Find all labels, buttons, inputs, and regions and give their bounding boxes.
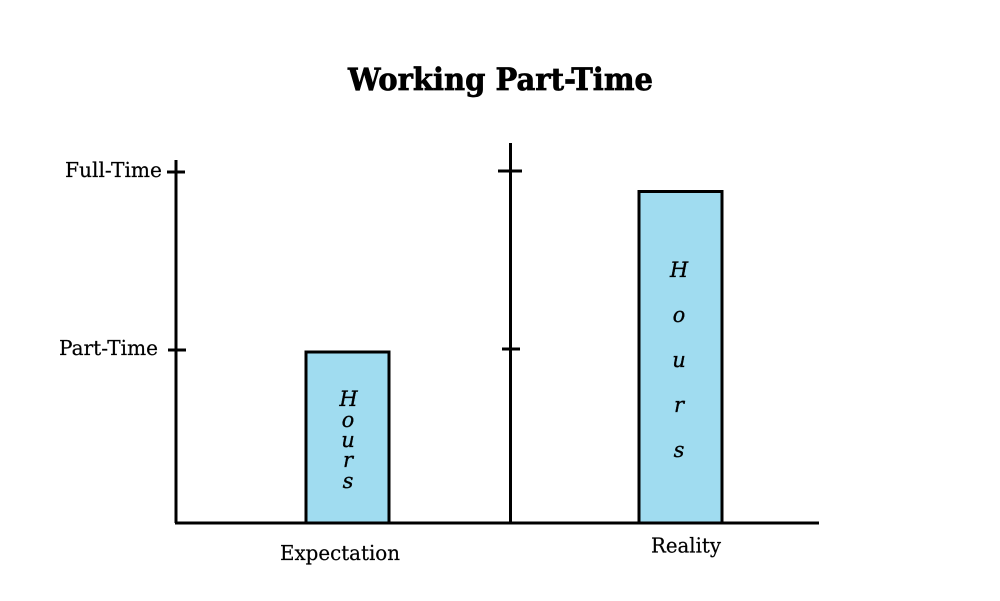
bar label: reality hours: o xyxy=(673,303,685,327)
y label: full-time: Full-Time xyxy=(65,158,162,182)
title: Working Part-Time xyxy=(347,62,653,98)
bar label: reality hours: r xyxy=(674,393,686,417)
bar: expectation xyxy=(306,352,389,523)
bar label: expectation hours: s xyxy=(343,469,354,493)
middle y axis xyxy=(498,143,522,523)
left y axis xyxy=(167,160,186,523)
x axis xyxy=(175,522,819,524)
bar label: expectation hours: o xyxy=(342,408,354,432)
y label: part-time: Part-Time xyxy=(59,336,158,360)
bar label: expectation hours xyxy=(338,387,358,493)
bar label: reality hours xyxy=(669,258,689,462)
bar label: reality hours: u xyxy=(672,348,686,372)
bar: reality xyxy=(639,192,722,523)
bar label: expectation hours: H xyxy=(338,387,358,411)
bar label: reality hours: s xyxy=(674,438,685,462)
bar label: reality hours: H xyxy=(669,258,689,282)
bar label: expectation hours: u xyxy=(341,428,355,452)
x label: expectation: Expectation xyxy=(280,541,400,565)
chart: expectation vs reality xyxy=(59,143,819,565)
x label: reality: Reality xyxy=(651,534,721,558)
bar label: expectation hours: r xyxy=(343,448,355,472)
